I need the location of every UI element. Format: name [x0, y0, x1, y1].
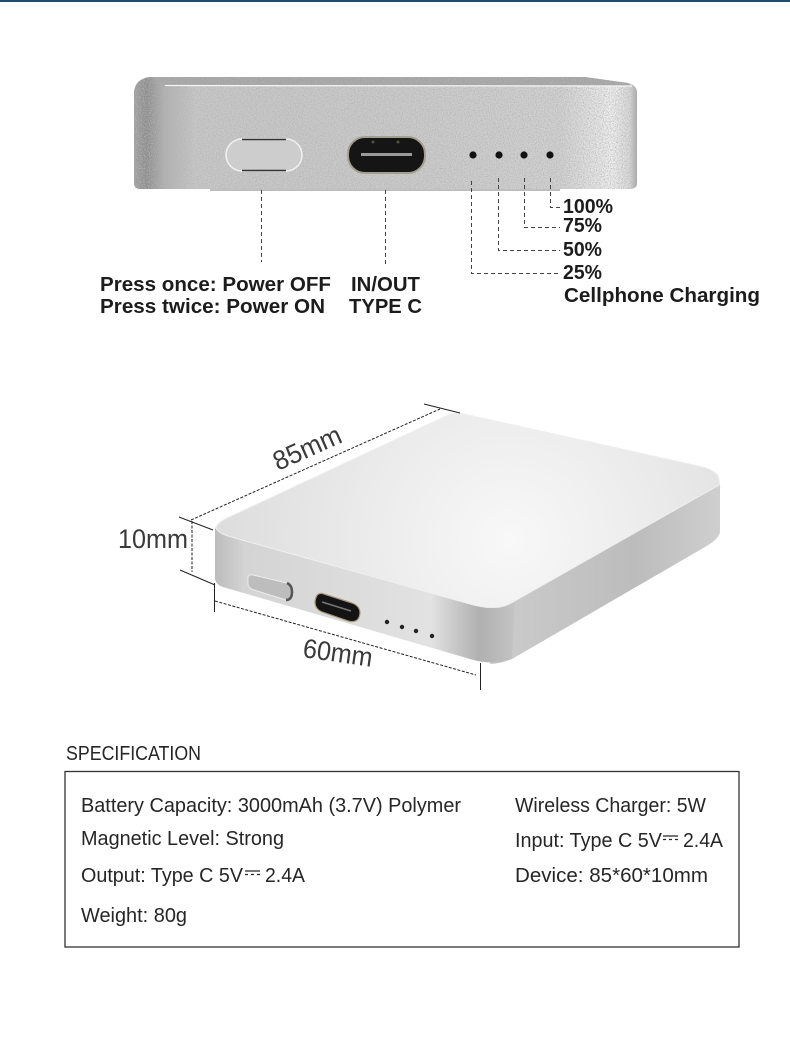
label: power button: Press once: Power OFF: [100, 274, 331, 296]
label: battery levels: 25%: [563, 262, 602, 284]
spec: magnetic level: Magnetic Level: Strong: [81, 828, 284, 850]
label: port: IN/OUT: [351, 274, 420, 296]
device top edge: [150, 77, 632, 86]
label: power button: [100, 274, 331, 318]
right side face: [490, 478, 720, 664]
spec: battery capacity: Battery Capacity: 3000mAh (3.7V) Polymer: [81, 795, 461, 817]
dimension label: 60mm: 60mm: [301, 633, 375, 673]
front face: [215, 527, 515, 662]
leader lines: [262, 178, 560, 274]
label: battery levels: 100%: [563, 196, 613, 218]
spec: weight: Weight: 80g: [81, 905, 187, 927]
label: power button: Press twice: Power ON: [100, 296, 325, 318]
dimension lines: [179, 404, 480, 690]
panel border: [65, 772, 739, 947]
device body: [134, 77, 637, 189]
label: port: [349, 274, 422, 318]
dimension label: 10mm: 10mm: [118, 524, 188, 554]
label: port: TYPE C: [349, 296, 422, 318]
icon: USB-C port: [315, 593, 360, 622]
icon: USB-C port: [348, 137, 425, 173]
icon: side button: [248, 575, 292, 600]
heading: specification: SPECIFICATION: [66, 743, 201, 765]
dimension label: 85mm: 85mm: [268, 420, 346, 476]
icon: power button: [226, 139, 302, 171]
label: battery levels: [563, 196, 760, 307]
panel: specification: [65, 772, 739, 947]
icon: LED indicator dots: [469, 151, 554, 159]
spec: input: Input: Type C 5V: [515, 830, 663, 852]
spec: device size: Device: 85*60*10mm: [515, 865, 708, 887]
spec: wireless charger: Wireless Charger: 5W: [515, 795, 706, 817]
spec: output: 2.4A: [265, 865, 306, 887]
spec: output: Output: Type C 5V: [81, 865, 244, 887]
label: battery levels: Cellphone Charging: [564, 285, 760, 307]
device perspective photo: [215, 413, 720, 664]
device end view photo: [134, 77, 637, 190]
label: battery levels: 50%: [563, 239, 602, 261]
top header bar: [0, 0, 790, 2]
label: battery levels: 75%: [563, 215, 602, 237]
spec: input: 2.4A: [683, 830, 724, 852]
top face: [216, 413, 719, 608]
icon: LED dots: [385, 620, 434, 638]
